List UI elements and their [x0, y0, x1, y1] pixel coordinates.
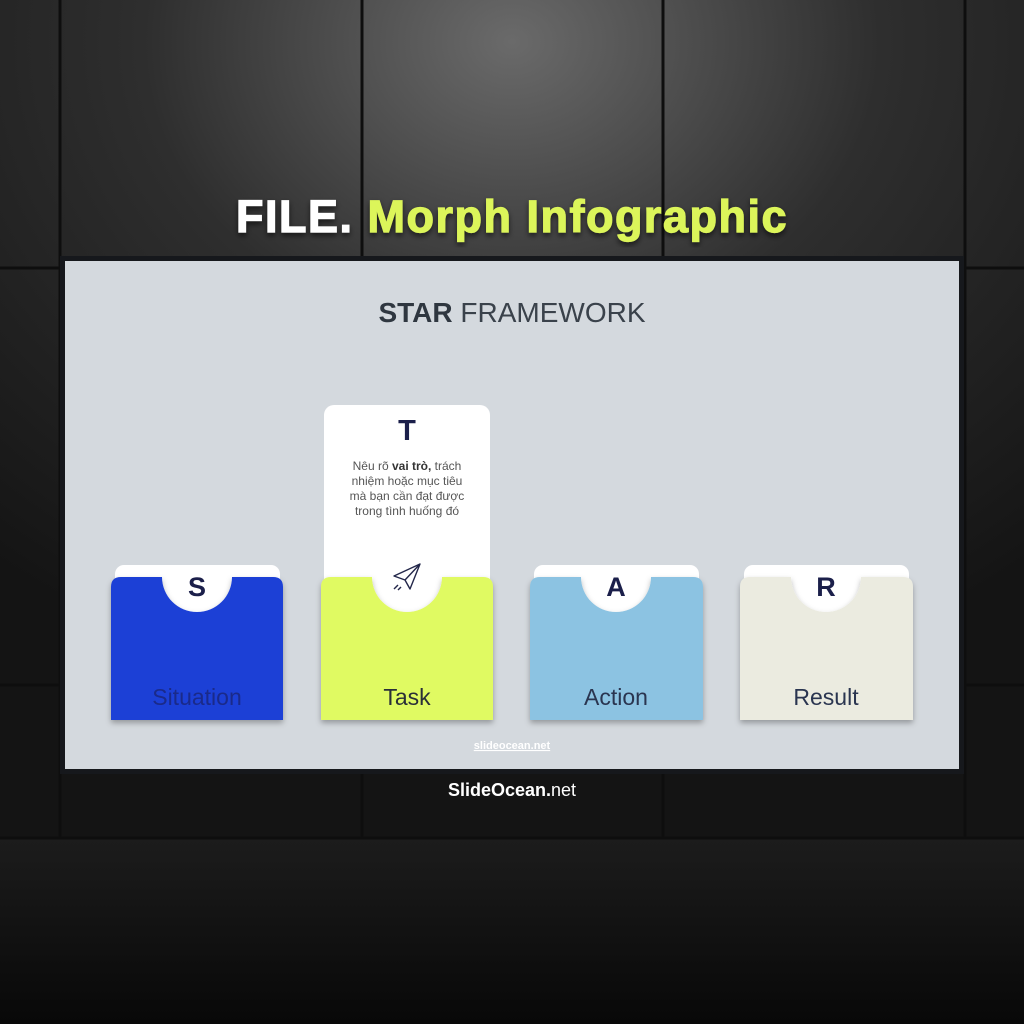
panel: slide	[60, 256, 964, 774]
card: R Result: R	[816, 572, 836, 602]
card: R Result	[740, 565, 913, 720]
card: A Action: Action	[584, 684, 648, 710]
text block: task description: mà bạn cần đạt được	[350, 489, 464, 503]
heading: STAR FRAMEWORK: STAR FRAMEWORK	[378, 297, 646, 328]
card: S Situation: Situation	[152, 684, 242, 710]
footer link: slideocean.net	[474, 740, 551, 752]
card: T Task: Task	[383, 684, 431, 710]
card: R Result: Result	[793, 684, 859, 710]
card: S Situation: S	[188, 572, 206, 602]
text block: task description: Nêu rõ vai trò, trách	[353, 459, 461, 473]
brand: SlideOcean.net	[448, 780, 576, 800]
icon: paper plane	[394, 564, 420, 590]
card: A Action: A	[606, 572, 626, 602]
text block: task description: nhiệm hoặc mục tiêu	[352, 474, 462, 488]
card: T Task: T	[398, 415, 416, 447]
title: FILE. Morph Infographic	[236, 191, 788, 242]
text block: task description: trong tình huống đó	[355, 504, 459, 518]
card: A Action	[530, 565, 703, 720]
card: T Task	[321, 405, 493, 720]
card: S Situation	[111, 565, 283, 720]
